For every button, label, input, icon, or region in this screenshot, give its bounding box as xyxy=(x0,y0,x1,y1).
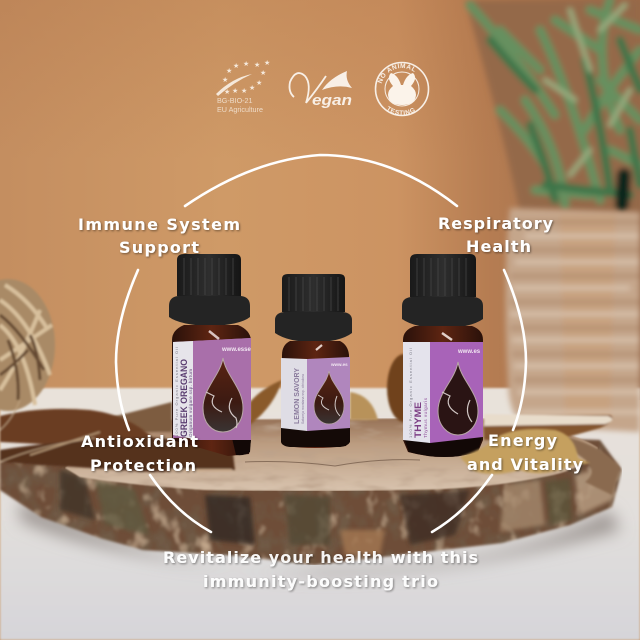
bottle: Lemon Savory: Satureja montana ssp. citriodora xyxy=(301,374,305,424)
glass highlight xyxy=(316,345,322,350)
bottle: Greek Oregano: www.esse xyxy=(221,347,251,353)
drop swirl xyxy=(318,395,340,416)
wooden slice xyxy=(0,418,622,565)
label text: THYME xyxy=(413,402,424,438)
circular ring arcs xyxy=(116,155,526,532)
glass highlight xyxy=(442,333,452,340)
collar xyxy=(402,297,483,328)
EU stars: ★ xyxy=(222,76,228,84)
wicker basket xyxy=(505,208,640,432)
label text: LEMON SAVORY xyxy=(294,368,301,424)
twine ball xyxy=(0,279,55,411)
label: Energy and Vitality xyxy=(467,431,584,474)
cap ribs xyxy=(184,258,233,295)
icon: no animal testing badge xyxy=(374,62,430,116)
EU stars: ★ xyxy=(224,88,230,96)
label: Antioxidant Protection: Antioxidant xyxy=(81,432,198,451)
tagline: immunity-boosting trio xyxy=(203,572,438,591)
wooden sticks on the left xyxy=(0,400,235,472)
EU stars: ★ xyxy=(243,60,249,68)
background props: nut and leaves xyxy=(100,354,421,432)
glass highlight xyxy=(209,331,219,339)
dark base xyxy=(404,436,482,457)
tagline xyxy=(163,548,478,591)
top surface xyxy=(65,418,598,491)
label xyxy=(307,357,350,431)
drop swirl xyxy=(442,392,472,422)
bottle: Greek Oregano xyxy=(169,254,251,456)
cap xyxy=(410,254,476,297)
dark base xyxy=(232,438,251,455)
bark patches xyxy=(60,462,618,555)
label: Antioxidant Protection xyxy=(81,432,198,475)
white plate with wood xyxy=(484,414,612,442)
dark base xyxy=(281,428,350,447)
bottle: Greek Oregano: 100% Pure Organic Essential Oil xyxy=(174,347,179,437)
bottle: Thyme: www.es xyxy=(457,349,481,355)
bottle: Lemon Savory: www.es xyxy=(330,362,348,367)
bark side xyxy=(0,430,622,565)
shadow of floor behind board xyxy=(20,500,620,575)
collar xyxy=(169,296,250,326)
EU stars: ★ xyxy=(232,87,238,95)
vegan word: egan xyxy=(312,92,352,109)
crack xyxy=(245,460,420,466)
EU stars: ★ xyxy=(233,62,239,70)
cap ribs xyxy=(417,258,466,296)
label: Energy and Vitality: and Vitality xyxy=(467,455,584,474)
EU stars: ★ xyxy=(256,79,262,87)
label: Immune System Support xyxy=(78,215,240,257)
collar xyxy=(275,312,352,342)
drop swirl xyxy=(206,392,237,428)
icon: no animal testing badge: NO ANIMAL xyxy=(378,63,414,84)
EU stars: ★ xyxy=(264,59,270,67)
EU stars: ★ xyxy=(249,84,255,92)
bottle: Thyme xyxy=(402,254,483,457)
label: Respiratory Health: Health xyxy=(466,237,531,256)
wing xyxy=(322,71,352,90)
label: Antioxidant Protection: Protection xyxy=(90,456,196,475)
glass body xyxy=(403,326,483,457)
bottle: Lemon Savory xyxy=(275,274,352,448)
icon: EU organic leaf logo xyxy=(216,59,270,114)
bottle: Thyme: 100% Pure Organic Essential Oil xyxy=(408,348,413,438)
label: Immune System Support: Support xyxy=(119,238,199,257)
label: Respiratory Health: Respiratory xyxy=(438,214,554,233)
glass body xyxy=(172,325,251,456)
label: Energy and Vitality: Energy xyxy=(488,431,558,450)
icon: no animal testing badge: TESTING xyxy=(388,106,415,115)
label text: GREEK OREGANO xyxy=(179,359,190,437)
bunny xyxy=(388,73,416,105)
EU stars: ★ xyxy=(241,87,247,95)
yellow leaf in front xyxy=(460,429,590,474)
EU stars xyxy=(222,59,270,96)
EU stars: ★ xyxy=(226,67,232,75)
label: Respiratory Health xyxy=(438,214,554,256)
cap ribs xyxy=(289,277,338,311)
EU stars: ★ xyxy=(254,61,260,69)
icon: EU organic leaf logo: EU Agriculture xyxy=(217,105,263,114)
badge lettering xyxy=(381,68,423,89)
drop window xyxy=(203,358,243,432)
drop window xyxy=(438,362,478,435)
cap xyxy=(282,274,345,312)
bottle: Thyme: Thymus vulgaris xyxy=(423,397,428,438)
EU certificate text: BG-BIO-21 xyxy=(217,96,253,105)
cap xyxy=(177,254,241,296)
bark rim on the right xyxy=(540,432,620,495)
drop window xyxy=(314,371,344,424)
label xyxy=(430,342,483,443)
tagline: Revitalize your health with this xyxy=(163,548,478,567)
glass body xyxy=(282,341,349,448)
EU stars: ★ xyxy=(260,69,266,77)
icon: vegan logo xyxy=(290,71,352,109)
EU leaf stroke xyxy=(216,74,252,96)
script V xyxy=(290,73,326,103)
label xyxy=(173,338,251,438)
label: Immune System Support: Immune System xyxy=(78,215,240,234)
plant: blurred rosemary xyxy=(465,0,640,212)
bottle: Greek Oregano: Origanum vulgare ssp. hirtum xyxy=(188,369,193,437)
